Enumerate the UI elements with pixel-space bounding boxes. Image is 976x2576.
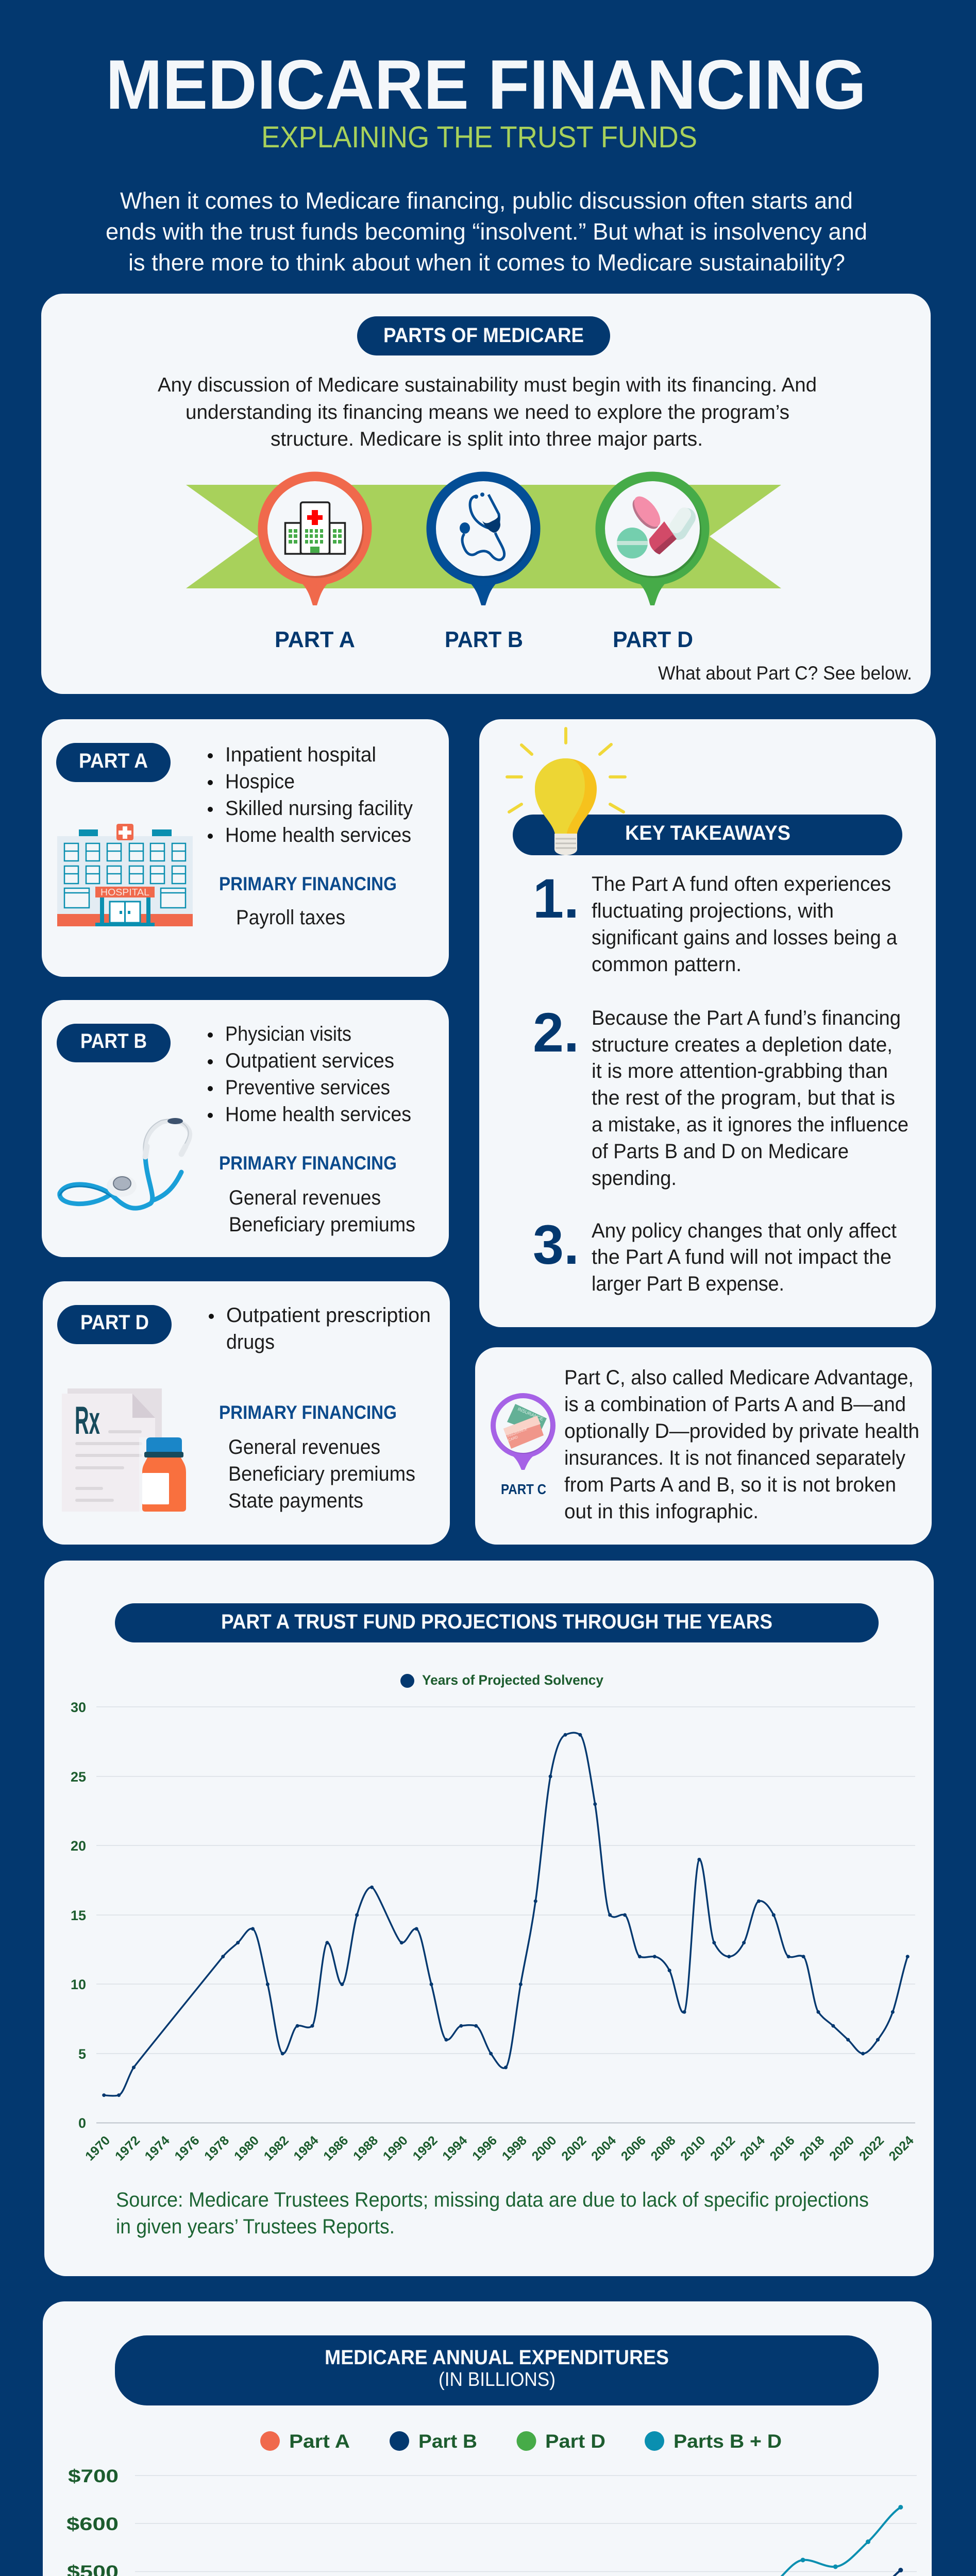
list: Part B services xyxy=(208,1023,411,1126)
line chart: years of projected solvency: 30 xyxy=(71,1700,86,1715)
line chart: annual expenditures xyxy=(66,2466,917,2576)
list: Part B services: Physician visits xyxy=(225,1023,351,1045)
line chart: years of projected solvency: 20 xyxy=(71,1838,86,1854)
heading: primary financing Part D: PRIMARY FINANCING xyxy=(219,1402,397,1423)
takeaway 2: the rest of the program, but that is xyxy=(592,1087,895,1109)
icon: Part B pin with stethoscope xyxy=(427,472,540,605)
text: Part C description: is a combination of Parts A and B—and xyxy=(564,1393,906,1416)
green ribbon xyxy=(186,485,781,588)
note: Part C: What about Part C? See below. xyxy=(658,663,912,684)
takeaway 1: fluctuating projections, with xyxy=(592,900,834,922)
text: Part A financing: Payroll taxes xyxy=(236,906,345,929)
list: Part D services xyxy=(209,1304,431,1353)
text: Part C description: from Parts A and B, so it is not broken xyxy=(564,1473,896,1496)
title: MEDICARE FINANCING xyxy=(106,45,866,124)
icon: Part C pin with insurance cards: CARD xyxy=(508,1435,518,1443)
line chart: years of projected solvency: 1992 xyxy=(410,2133,441,2164)
intro text block: is there more to think about when it comes to Medicare sustainability? xyxy=(128,249,845,276)
line chart: years of projected solvency: 2002 xyxy=(559,2133,589,2164)
list: Part D services: drugs xyxy=(226,1331,275,1353)
intro paragraph: understanding its financing means we need to explore the program’s xyxy=(186,401,789,423)
intro text block: When it comes to Medicare financing, public discussion often starts and xyxy=(120,188,853,214)
source note: trust fund chart: Source: Medicare Trustees Reports; missing data are due to lack of specific projections xyxy=(116,2189,869,2211)
icon: hospital building: HOSPITAL xyxy=(100,887,149,897)
text: Part D financing: General revenues xyxy=(228,1436,380,1459)
heading: primary financing Part B: PRIMARY FINANCING xyxy=(219,1153,397,1174)
takeaway 1: common pattern. xyxy=(592,953,742,976)
takeaway 2: it is more attention-grabbing than xyxy=(592,1060,888,1082)
line chart: years of projected solvency: 10 xyxy=(71,1977,86,1992)
line chart: years of projected solvency: 2000 xyxy=(529,2133,560,2164)
line chart: years of projected solvency: 2012 xyxy=(708,2133,738,2164)
text: Part B financing: General revenues xyxy=(229,1187,381,1209)
line chart: years of projected solvency: 2006 xyxy=(618,2133,649,2164)
line chart: years of projected solvency: 1998 xyxy=(499,2133,530,2164)
line chart: years of projected solvency: 1974 xyxy=(142,2133,173,2164)
icon: lightbulb xyxy=(507,728,625,855)
source note: trust fund chart xyxy=(116,2189,869,2238)
legend: expenditure series: Parts B + D xyxy=(674,2431,782,2452)
series: Part B xyxy=(151,2570,901,2576)
line chart: years of projected solvency: 1988 xyxy=(350,2133,381,2164)
icon: Part A pin with hospital xyxy=(258,472,372,605)
heading pill: Part D xyxy=(57,1305,172,1344)
text: Part C description: out in this infographic. xyxy=(564,1500,759,1523)
label: Part D: PART D xyxy=(613,627,693,652)
label: Part A: PART A xyxy=(275,627,355,652)
list: Part B services: Preventive services xyxy=(225,1076,390,1099)
text: Part B financing xyxy=(229,1187,415,1236)
line chart: years of projected solvency: 1996 xyxy=(469,2133,500,2164)
panel: parts of Medicare xyxy=(41,294,931,694)
takeaway 3: larger Part B expense. xyxy=(592,1273,784,1295)
takeaway 2: spending. xyxy=(592,1167,677,1190)
line chart: years of projected solvency: 1994 xyxy=(440,2133,470,2164)
intro paragraph: structure. Medicare is split into three major parts. xyxy=(271,428,703,450)
text: Part D financing: State payments xyxy=(228,1489,363,1512)
line chart: annual expenditures: $700 xyxy=(68,2466,119,2486)
line chart: years of projected solvency: 1970 xyxy=(82,2133,113,2164)
line chart: years of projected solvency: 15 xyxy=(71,1908,86,1923)
subtitle: EXPLAINING THE TRUST FUNDS xyxy=(261,121,697,154)
list: Part A services: Home health services xyxy=(225,824,411,846)
line chart: years of projected solvency: 25 xyxy=(71,1769,86,1785)
intro paragraph xyxy=(158,374,817,450)
list: Part A services xyxy=(208,743,413,846)
takeaway 1 xyxy=(533,867,898,976)
legend: expenditure series: Part B xyxy=(418,2431,477,2452)
heading pill: annual expenditures xyxy=(115,2335,879,2405)
text: Part C description: Part C, also called Medicare Advantage, xyxy=(564,1366,914,1389)
line chart: years of projected solvency xyxy=(71,1700,917,2164)
list: Part B services: Home health services xyxy=(225,1103,411,1126)
legend: years of projected solvency: Years of Projected Solvency xyxy=(422,1672,603,1688)
line chart: years of projected solvency: 2024 xyxy=(886,2133,917,2164)
panel: Part B xyxy=(42,1000,449,1257)
takeaway 1: The Part A fund often experiences xyxy=(592,873,891,895)
text: Part C description: optionally D—provided by private health xyxy=(564,1420,919,1443)
line chart: years of projected solvency: 2020 xyxy=(827,2133,857,2164)
panel: key takeaways xyxy=(479,719,936,1327)
list: Part A services: Inpatient hospital xyxy=(225,743,376,766)
heading pill: Part D: PART D xyxy=(80,1311,149,1334)
text: Part D financing xyxy=(228,1436,415,1512)
heading pill: Part B: PART B xyxy=(80,1030,147,1053)
legend: expenditure series: Part A xyxy=(289,2431,350,2452)
heading pill: annual expenditures: MEDICARE ANNUAL EXPENDITURES xyxy=(325,2346,669,2369)
icon: Part C pin with insurance cards: INSURANCE xyxy=(517,1406,544,1422)
label: Part B: PART B xyxy=(445,627,523,652)
icon: Part D pin with pills xyxy=(596,472,709,605)
legend: expenditure series: Part D xyxy=(545,2431,605,2452)
heading pill: Part A xyxy=(56,743,171,782)
heading pill: Part B xyxy=(57,1024,171,1062)
series: Parts B + D xyxy=(346,2507,901,2576)
list: Part D services: Outpatient prescription xyxy=(226,1304,431,1327)
takeaway 2: 2. xyxy=(533,1001,579,1063)
line chart: years of projected solvency: 1986 xyxy=(321,2133,351,2164)
icon: stethoscope illustration xyxy=(60,1118,190,1208)
panel: Part A xyxy=(42,719,449,977)
panel: Part C xyxy=(475,1347,932,1545)
heading pill: annual expenditures: (IN BILLIONS) xyxy=(439,2369,556,2391)
line chart: years of projected solvency: 1972 xyxy=(112,2133,143,2164)
heading pill: trust fund projections xyxy=(115,1603,879,1642)
takeaway 3: 3. xyxy=(533,1213,579,1276)
takeaway 3 xyxy=(533,1213,897,1295)
line chart: years of projected solvency: 0 xyxy=(78,2115,86,2131)
icon: prescription and bottle: Rx xyxy=(75,1399,100,1443)
line chart: years of projected solvency: 2018 xyxy=(797,2133,828,2164)
icon: Part C pin with insurance cards xyxy=(491,1393,556,1470)
text: Part D financing: Beneficiary premiums xyxy=(228,1463,415,1485)
intro text block: ends with the trust funds becoming “insolvent.” But what is insolvency and xyxy=(106,218,867,245)
panel: Part A trust fund chart xyxy=(44,1561,934,2276)
heading pill: parts of Medicare xyxy=(357,316,610,355)
takeaway 1: significant gains and losses being a xyxy=(592,926,898,949)
line chart: years of projected solvency: 2010 xyxy=(678,2133,708,2164)
line chart: years of projected solvency: 1976 xyxy=(172,2133,203,2164)
line chart: years of projected solvency: 2022 xyxy=(856,2133,887,2164)
line chart: years of projected solvency: 1984 xyxy=(291,2133,322,2164)
line chart: years of projected solvency: 2014 xyxy=(737,2133,768,2164)
line chart: years of projected solvency: 5 xyxy=(78,2046,86,2062)
intro text block xyxy=(106,188,867,276)
legend: expenditure series xyxy=(260,2431,782,2452)
heading pill: key takeaways xyxy=(513,815,902,855)
icon: Part C pin with insurance cards: INSURANCE xyxy=(507,1427,528,1438)
panel: annual expenditures chart xyxy=(43,2301,932,2576)
line chart: years of projected solvency: 1978 xyxy=(201,2133,232,2164)
line chart: years of projected solvency: 1982 xyxy=(261,2133,292,2164)
icon: hospital building xyxy=(57,824,193,926)
heading: primary financing Part A: PRIMARY FINANCING xyxy=(219,873,397,894)
icon: prescription and bottle xyxy=(62,1388,186,1512)
takeaway 2 xyxy=(533,1001,908,1190)
heading pill: parts of Medicare: PARTS OF MEDICARE xyxy=(383,324,584,347)
intro paragraph: Any discussion of Medicare sustainability must begin with its financing. And xyxy=(158,374,817,396)
label: Part C: PART C xyxy=(501,1481,546,1497)
takeaway 1: 1. xyxy=(533,867,579,929)
line chart: years of projected solvency: 1990 xyxy=(380,2133,411,2164)
takeaway 2: structure creates a depletion date, xyxy=(592,1033,893,1056)
line chart: annual expenditures: $600 xyxy=(66,2514,119,2534)
takeaway 3: the Part A fund will not impact the xyxy=(592,1246,891,1268)
heading pill: key takeaways: KEY TAKEAWAYS xyxy=(625,822,790,844)
heading pill: Part A: PART A xyxy=(79,750,148,772)
heading pill: trust fund projections: PART A TRUST FUND PROJECTIONS THROUGH THE YEARS xyxy=(221,1611,772,1633)
list: Part A services: Hospice xyxy=(225,770,295,793)
takeaway 3: Any policy changes that only affect xyxy=(592,1219,897,1242)
takeaway 2: Because the Part A fund’s financing xyxy=(592,1007,901,1029)
text: Part B financing: Beneficiary premiums xyxy=(229,1213,415,1236)
line chart: years of projected solvency: 2016 xyxy=(767,2133,798,2164)
takeaway 2: a mistake, as it ignores the influence xyxy=(592,1113,908,1136)
list: Part B services: Outpatient services xyxy=(225,1049,394,1072)
line chart: years of projected solvency: 2004 xyxy=(588,2133,619,2164)
panel: Part D xyxy=(43,1281,450,1545)
takeaway 2: of Parts B and D on Medicare xyxy=(592,1140,849,1163)
source note: trust fund chart: in given years’ Trustees Reports. xyxy=(116,2215,395,2238)
text: Part C description xyxy=(564,1366,919,1523)
line chart: years of projected solvency: 1980 xyxy=(231,2133,262,2164)
text: Part C description: insurances. It is not financed separately xyxy=(564,1447,905,1469)
list: Part A services: Skilled nursing facility xyxy=(225,797,413,820)
line chart: years of projected solvency: 2008 xyxy=(648,2133,679,2164)
